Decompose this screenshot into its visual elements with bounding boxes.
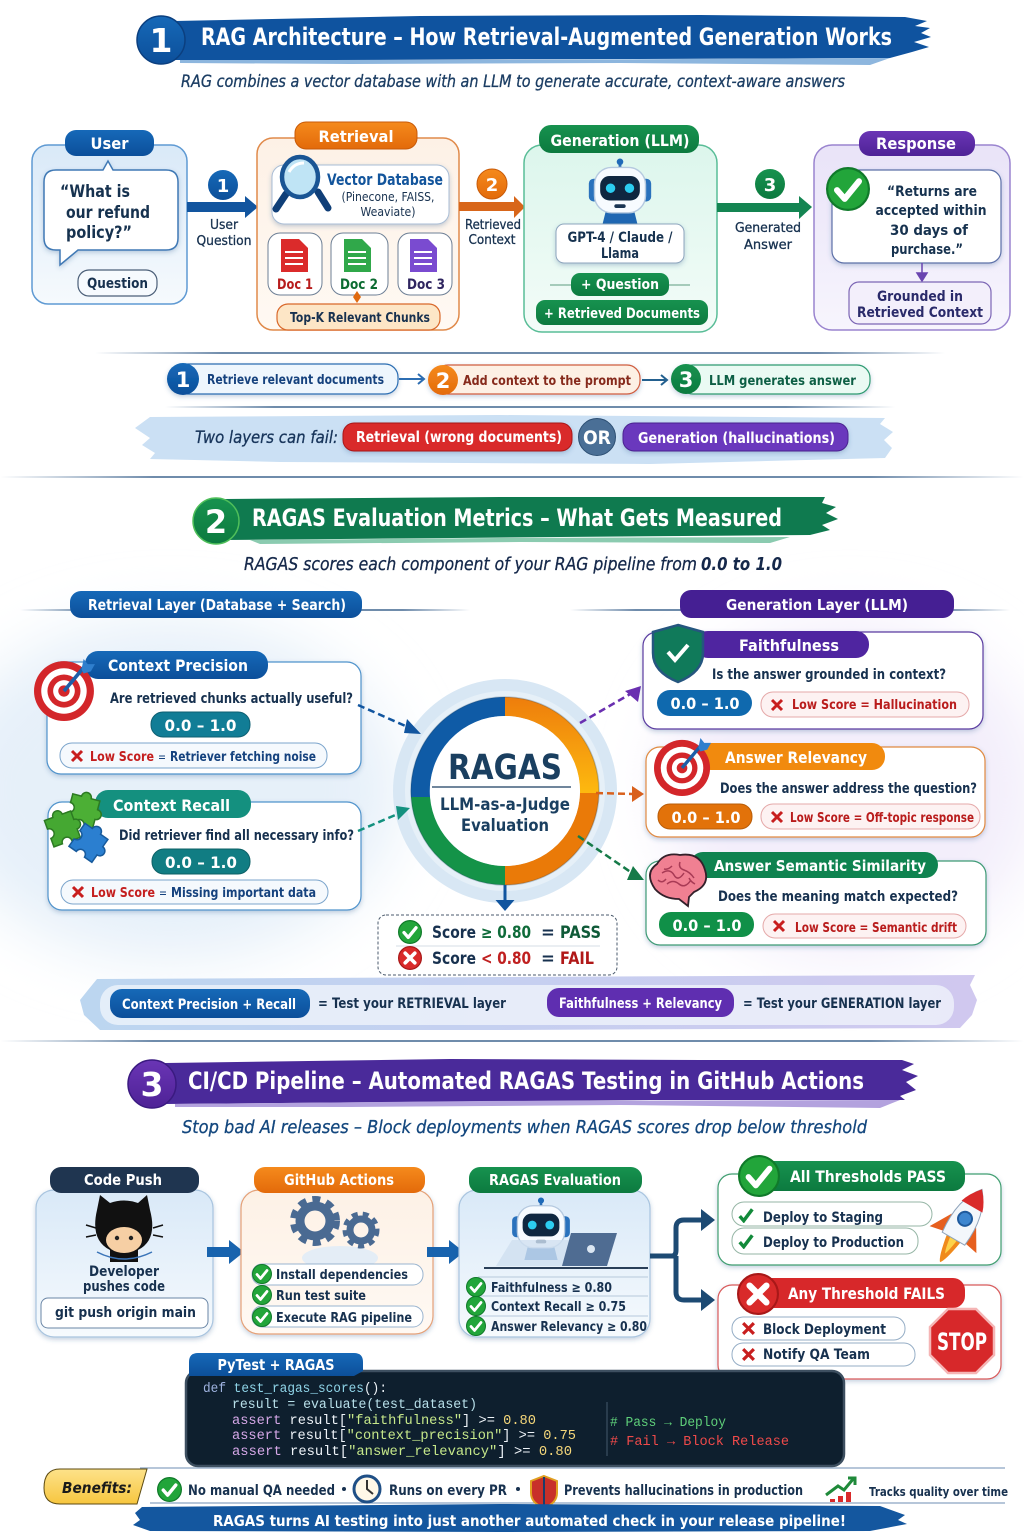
- answer box: 30 days of: [890, 223, 969, 239]
- low score note: Low Score = Off-topic response: [790, 811, 974, 826]
- pass fail box: Score: [432, 923, 476, 942]
- header: [254, 1167, 425, 1193]
- header: [745, 1161, 965, 1191]
- generation header: Generation (LLM): [550, 131, 690, 150]
- step list: Execute RAG pipeline: [276, 1310, 412, 1326]
- threshold list: Answer Relevancy ≥ 0.80: [491, 1319, 647, 1335]
- icon: stop sign: STOP: [937, 1328, 987, 1356]
- section 2 banner: 2: [205, 503, 227, 541]
- icon: robot: [589, 158, 651, 226]
- icon: octocat: [86, 1195, 163, 1262]
- action list: Notify QA Team: [763, 1347, 870, 1363]
- low score note: =: [158, 750, 166, 764]
- step 1: 1: [176, 368, 190, 392]
- grounded box: Retrieved Context: [857, 305, 983, 321]
- answer box: “Returns are: [887, 184, 977, 200]
- response header: [859, 131, 975, 156]
- developer label: Developer: [89, 1264, 159, 1280]
- header: [50, 1167, 199, 1193]
- plus question pill: + Question: [581, 277, 659, 293]
- speech bubble: policy?”: [66, 223, 132, 243]
- or badge: [578, 418, 616, 456]
- section 2 banner: [193, 497, 838, 544]
- low score note: [763, 914, 966, 938]
- question: Did retriever find all necessary info?: [119, 828, 354, 844]
- question: Is the answer grounded in context?: [712, 667, 946, 683]
- ragas evaluation ring: RAGAS: [448, 748, 562, 788]
- low score note: [60, 743, 327, 768]
- pass fail box: [378, 915, 617, 975]
- vector database label: Vector Database: [327, 170, 443, 189]
- header: [469, 1167, 642, 1193]
- code editor: def test_ragas_scores():: [203, 1382, 387, 1397]
- retrieval pill: [110, 989, 310, 1018]
- benefit: hallucinations: Prevents hallucinations in production: [564, 1483, 803, 1499]
- user header: [65, 130, 154, 156]
- step flow row: [167, 363, 870, 395]
- low score note: [761, 804, 980, 829]
- arrow 2: retrieved context: 2: [486, 175, 498, 196]
- section 3 banner: [128, 1059, 918, 1108]
- git command: git push origin main: [55, 1305, 196, 1321]
- code editor: result = evaluate(test_dataset): [232, 1398, 477, 1413]
- developer label: [83, 1264, 165, 1295]
- arrow 2: retrieved context: Retrieved: [465, 217, 521, 233]
- arrow 1: user question: User: [210, 217, 238, 233]
- vector database box: [272, 165, 449, 224]
- card: answer semantic similarity: [646, 852, 986, 945]
- header: [750, 1278, 965, 1308]
- header: RAGAS Evaluation: [489, 1171, 621, 1189]
- model box: Llama: [601, 246, 639, 262]
- step 3: LLM generates answer: [709, 373, 856, 389]
- low score note: Low Score = Semantic drift: [795, 921, 957, 936]
- icon: pass check: [739, 1156, 779, 1196]
- deploy list: Deploy to Staging: [763, 1210, 883, 1226]
- header pill: Context Recall: [113, 796, 230, 815]
- header pill: Context Precision: [108, 656, 248, 675]
- grounded box: [849, 282, 991, 324]
- icon: target: [654, 738, 711, 796]
- question: Are retrieved chunks actually useful?: [110, 691, 353, 707]
- icon: rocket: [917, 1176, 1005, 1276]
- arrow 1: user question: Question: [196, 233, 252, 249]
- vector database label: (Pinecone, FAISS,: [342, 190, 434, 204]
- retrieval failure pill: Retrieval (wrong documents): [356, 428, 562, 446]
- low score note: Retriever fetching noise: [170, 750, 316, 765]
- score range: 0.0 – 1.0: [672, 916, 742, 935]
- score range: [152, 849, 250, 874]
- low score note: [761, 692, 969, 717]
- generation pill: [547, 988, 734, 1017]
- arrow: code push to actions: [207, 1240, 244, 1264]
- step 3: 3: [679, 368, 693, 392]
- low score note: =: [159, 886, 167, 900]
- card: context precision: [34, 651, 361, 774]
- panel: generation: [524, 125, 717, 332]
- step list: Install dependencies: [276, 1267, 408, 1283]
- header pill: [95, 790, 251, 818]
- header pill: [690, 852, 938, 878]
- doc cards: Doc 3: [407, 277, 445, 293]
- ragas evaluation ring: Evaluation: [461, 816, 549, 836]
- header pill: Answer Relevancy: [725, 748, 867, 767]
- step list: Run test suite: [276, 1288, 366, 1304]
- plus retrieved documents pill: [536, 300, 708, 325]
- bracket arrows: [650, 1209, 715, 1311]
- benefit: every pr: [354, 1476, 507, 1502]
- question chip: [78, 270, 157, 296]
- deploy list: Deploy to Production: [763, 1235, 904, 1251]
- pass fail box: =: [541, 949, 555, 968]
- score range: [659, 912, 754, 937]
- code editor: # Fail → Block Release: [610, 1435, 789, 1450]
- benefits row: [44, 1468, 1008, 1508]
- header: Any Threshold FAILS: [788, 1284, 945, 1303]
- speech bubble: our refund: [66, 203, 150, 223]
- speech bubble: “What is: [60, 182, 130, 202]
- answer box: [832, 170, 1001, 263]
- user header: User: [90, 134, 129, 153]
- section 2 banner: RAGAS Evaluation Metrics – What Gets Measured: [252, 504, 782, 532]
- section 3 banner: 3: [141, 1065, 163, 1104]
- low score note: [61, 880, 328, 904]
- panel: all thresholds pass: [718, 1156, 1005, 1276]
- card: context recall: [43, 789, 361, 910]
- card: faithfulness: [643, 625, 983, 729]
- retrieval header: [295, 122, 417, 149]
- icon: magnifier: [276, 157, 328, 209]
- icon: green check: [827, 168, 869, 210]
- icon: target: [34, 659, 95, 721]
- section 3 banner: CI/CD Pipeline – Automated RAGAS Testing in GitHub Actions: [188, 1067, 864, 1095]
- arrow: [399, 374, 424, 384]
- pass fail box: ≥ 0.80: [481, 923, 531, 942]
- step 2: Add context to the prompt: [463, 373, 631, 389]
- icon: puzzle pieces: [43, 789, 115, 865]
- header pill: [695, 743, 885, 770]
- header pill: Answer Semantic Similarity: [714, 857, 926, 875]
- code editor: # Pass → Deploy: [610, 1416, 726, 1431]
- benefits tag: [44, 1469, 147, 1504]
- panel: user: [32, 130, 187, 304]
- pass fail box: < 0.80: [481, 949, 531, 968]
- vector database label: [327, 170, 443, 219]
- header pill: Faithfulness: [739, 636, 839, 655]
- generation header: [539, 125, 699, 153]
- arrow down: [917, 263, 927, 281]
- benefit: tracks quality: [826, 1478, 1008, 1502]
- git command: [41, 1298, 208, 1328]
- icon: stop sign: [930, 1309, 994, 1373]
- arrow down to result: [496, 885, 514, 911]
- vector database label: Weaviate): [360, 205, 416, 219]
- benefit: hallucinations: [531, 1476, 803, 1508]
- section 1 banner: 1: [150, 21, 172, 60]
- layer summary strip: [80, 975, 977, 1030]
- closing banner: [133, 1504, 907, 1532]
- two layers strip: Two layers can fail:: [195, 428, 338, 448]
- speech bubble: [44, 161, 178, 265]
- code tab: PyTest + RAGAS: [218, 1356, 334, 1374]
- step 2: [428, 365, 640, 395]
- benefit: every pr: Runs on every PR: [389, 1483, 507, 1499]
- generation pill: Faithfulness + Relevancy: [559, 996, 722, 1012]
- low score note: Missing important data: [171, 886, 316, 901]
- retrieval layer header: [20, 591, 470, 618]
- header: All Thresholds PASS: [790, 1167, 946, 1186]
- question: Does the meaning match expected?: [718, 889, 958, 905]
- doc cards: Doc 1: [277, 277, 313, 293]
- score range: [657, 690, 752, 716]
- arrow 3: generated answer: Generated: [735, 220, 801, 236]
- answer box: accepted within: [876, 203, 986, 219]
- icon: shield: [653, 625, 703, 682]
- step list: [252, 1264, 423, 1327]
- icon: gears: [293, 1199, 378, 1270]
- top-k chunks pill: Top-K Relevant Chunks: [290, 310, 430, 326]
- model box: [556, 224, 684, 263]
- ragas evaluation ring: LLM-as-a-Judge: [440, 795, 570, 815]
- deploy list: [732, 1202, 932, 1254]
- score range: [151, 712, 250, 737]
- doc cards: [268, 233, 452, 295]
- connector arrows: [358, 686, 644, 880]
- action list: Block Deployment: [763, 1322, 886, 1338]
- pass fail box: FAIL: [560, 949, 594, 968]
- code editor: assert result["answer_relevancy" ] >= 0.80: [232, 1445, 572, 1460]
- closing banner: RAGAS turns AI testing into just another automated check in your release pipeline!: [213, 1512, 846, 1530]
- pass fail box: PASS: [560, 923, 601, 942]
- header pill: [695, 631, 869, 658]
- top-k chunks pill: [277, 291, 440, 330]
- icon: fail x: [738, 1274, 778, 1314]
- benefit: no manual qa: No manual QA needed: [188, 1483, 335, 1499]
- card: answer relevancy: [646, 738, 985, 837]
- developer label: pushes code: [83, 1279, 165, 1295]
- arrow: [642, 375, 667, 385]
- generation layer header: [570, 590, 1010, 618]
- section 3 subtitle: Stop bad AI releases – Block deployments when RAGAS scores drop below threshold: [182, 1117, 868, 1138]
- header pill: [85, 651, 268, 679]
- doc cards: Doc 2: [340, 277, 378, 293]
- generation note: = Test your GENERATION layer: [743, 996, 942, 1012]
- step 1: Retrieve relevant documents: [207, 372, 384, 388]
- question chip: Question: [87, 276, 148, 292]
- score range: 0.0 – 1.0: [672, 808, 740, 827]
- score range: 0.0 – 1.0: [164, 716, 236, 735]
- panel: github actions: [241, 1167, 433, 1334]
- pytest code panel: [186, 1353, 844, 1466]
- action list: [732, 1317, 915, 1366]
- plus question pill: [550, 273, 690, 296]
- plus retrieved documents pill: + Retrieved Documents: [544, 306, 700, 322]
- step 3: [671, 364, 870, 394]
- low score note: Low Score: [91, 886, 155, 901]
- section 2 subtitle: RAGAS scores each component of your RAG pipeline from: [244, 555, 697, 575]
- answer box: purchase.”: [891, 242, 963, 258]
- step 2: 2: [436, 369, 450, 393]
- score range: 0.0 – 1.0: [165, 853, 237, 872]
- arrow 1: user question: [187, 170, 258, 249]
- icon: robot with laptop: [484, 1197, 648, 1268]
- low score note: Low Score: [90, 750, 154, 765]
- arrow 1: user question: 1: [217, 176, 229, 197]
- code editor: assert result["context_precision"] >= 0.75: [232, 1429, 576, 1444]
- retrieval failure pill: [343, 423, 572, 451]
- score range: 0.0 – 1.0: [670, 694, 740, 713]
- header: Code Push: [84, 1171, 162, 1189]
- response header: Response: [876, 134, 956, 153]
- step 1: [167, 363, 398, 395]
- panel: code push: [36, 1167, 213, 1337]
- low score note: Low Score = Hallucination: [792, 698, 957, 713]
- header: GitHub Actions: [284, 1171, 394, 1189]
- section 2 subtitle: 0.0 to 1.0: [701, 555, 782, 575]
- threshold list: [466, 1277, 648, 1336]
- code editor: [186, 1371, 844, 1466]
- threshold list: Faithfulness ≥ 0.80: [491, 1280, 612, 1296]
- generation failure pill: Generation (hallucinations): [638, 429, 835, 447]
- code editor: assert result["faithfulness"] >= 0.80: [232, 1414, 536, 1429]
- panel: retrieval: [257, 122, 459, 330]
- generation failure pill: [623, 423, 848, 451]
- retrieval layer header: Retrieval Layer (Database + Search): [88, 596, 346, 614]
- section 1 subtitle: RAG combines a vector database with an LLM to generate accurate, context-aware answers: [181, 72, 845, 92]
- score range: [658, 804, 752, 829]
- arrow 3: generated answer: Answer: [744, 237, 792, 253]
- grounded box: Grounded in: [877, 289, 963, 305]
- threshold list: Context Recall ≥ 0.75: [491, 1299, 626, 1315]
- arrow: actions to evaluation: [427, 1240, 464, 1264]
- benefit: no manual qa: [158, 1478, 335, 1501]
- section 1 banner: [137, 15, 931, 65]
- pass fail box: Score: [432, 949, 476, 968]
- pass fail box: =: [541, 923, 555, 942]
- panel: any threshold fails: [718, 1274, 1001, 1379]
- arrow 3: generated answer: 3: [764, 175, 776, 196]
- benefits tag: Benefits:: [62, 1479, 132, 1497]
- retrieval pill: Context Precision + Recall: [122, 997, 296, 1013]
- generation layer header: Generation Layer (LLM): [726, 596, 908, 614]
- arrow 2: retrieved context: [459, 169, 525, 248]
- code tab: [189, 1353, 363, 1376]
- retrieval note: = Test your RETRIEVAL layer: [318, 996, 507, 1012]
- ragas evaluation ring: [393, 679, 617, 903]
- or badge: OR: [583, 427, 611, 449]
- panel: ragas evaluation: [459, 1167, 650, 1337]
- model box: GPT-4 / Claude /: [568, 230, 673, 246]
- arrow 3: generated answer: [717, 169, 812, 253]
- retrieval header: Retrieval: [318, 127, 394, 146]
- icon: brain: [650, 854, 706, 906]
- two layers strip: [135, 415, 893, 464]
- arrow 2: retrieved context: Context: [468, 232, 516, 248]
- panel: response: [814, 131, 1010, 330]
